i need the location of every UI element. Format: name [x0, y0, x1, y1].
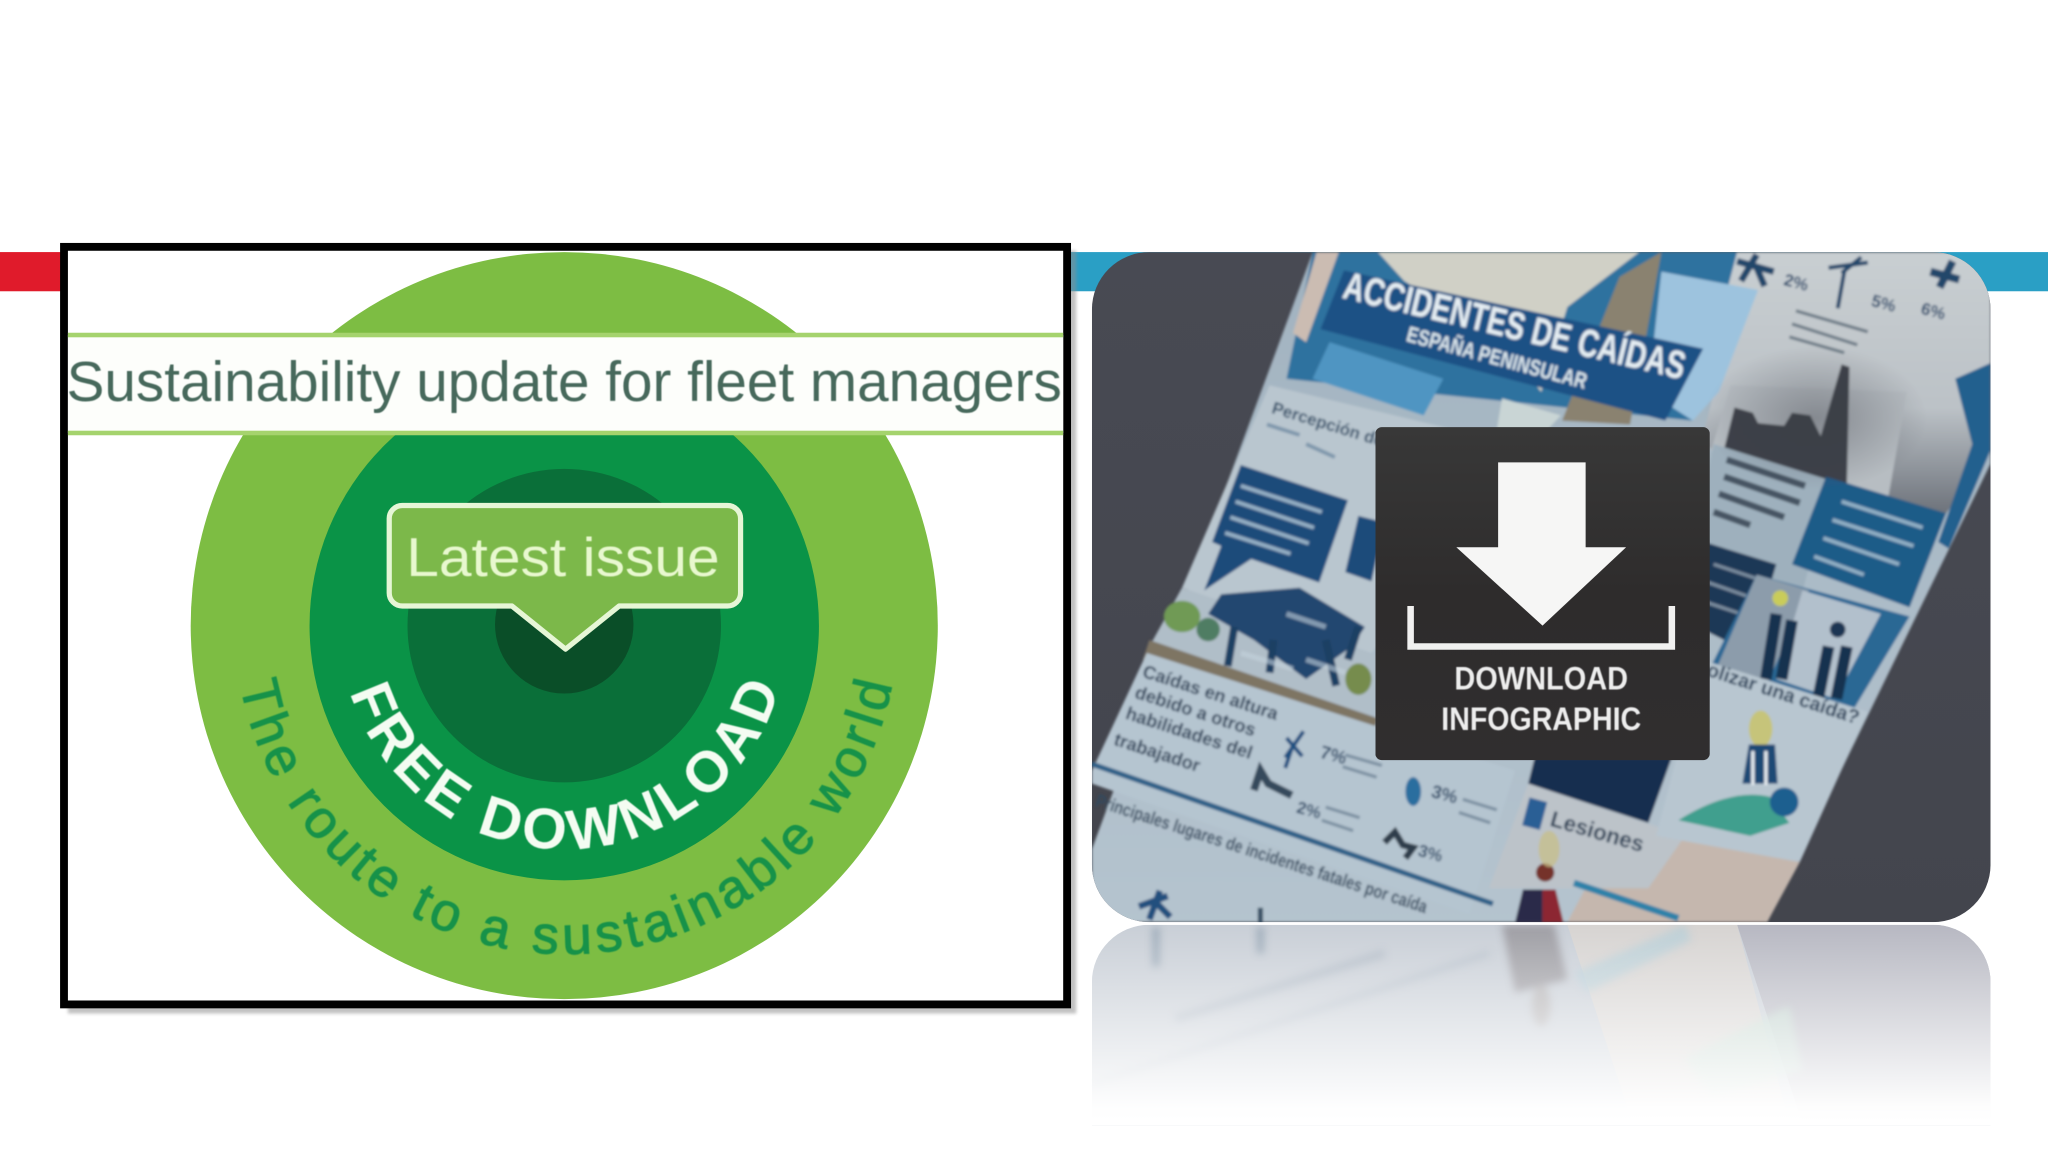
- poster: fall scene: olizar una caída?: [1704, 659, 1862, 729]
- callout: latest issue: [389, 505, 741, 649]
- poster: right text column: [1710, 444, 1827, 642]
- poster: beige corner: [1567, 836, 1800, 922]
- poster: title band: ESPAÑA PENINSULAR: [1404, 322, 1590, 394]
- poster: falls section: 7%: [1318, 741, 1349, 768]
- poster: dark box under download: [1528, 758, 1672, 823]
- red header band: [0, 252, 78, 291]
- poster: workers scene: [1711, 575, 1910, 712]
- poster: falls section: 3%: [1429, 780, 1460, 807]
- poster: top figures and statistics: 2%: [1782, 270, 1810, 295]
- reflection of infographic preview: [1092, 922, 1991, 1127]
- poster: falls section: Caídas en altura: [1140, 660, 1282, 724]
- poster: top right column: [1701, 252, 1991, 536]
- icon: download tray: [1411, 606, 1672, 647]
- banner text: Sustainability update for fleet managers: [67, 350, 1062, 413]
- poster: fatal incidents heading: Principales lugares de incidentes fatales por caída: [1093, 790, 1431, 917]
- poster: top figures and statistics: 6%: [1919, 299, 1948, 324]
- dark slate backdrop: [1092, 252, 1991, 922]
- poster: blue bar: [1574, 883, 1678, 918]
- innermost green circle: [495, 608, 634, 694]
- panel: sustainability badge: [60, 242, 1078, 1016]
- poster: falls section: habilidades del: [1123, 702, 1255, 763]
- poster: falls section: debido a otros: [1132, 681, 1259, 740]
- blue header band: [1058, 252, 2048, 291]
- middle green ring: [310, 435, 819, 880]
- poster: right city silhouette: [1711, 364, 1907, 503]
- callout: latest issue: Latest issue: [406, 526, 720, 588]
- poster: right blue rail: [1938, 363, 1991, 549]
- poster: fall scene: [1679, 662, 1864, 864]
- poster: falls section: [1092, 652, 1498, 862]
- poster: perception panel: [1181, 386, 1443, 652]
- banner strip: [60, 335, 1079, 433]
- poster: falls section: trabajador: [1112, 728, 1203, 776]
- poster: top figures and statistics: 5%: [1869, 291, 1898, 316]
- inner green ring: [408, 469, 721, 782]
- poster: title band: ACCIDENTES DE CAÍDAS: [1339, 264, 1690, 388]
- poster: top figures and statistics: [1737, 255, 1959, 324]
- curved text: the route to a sustainable world: The route to a sustainable world: [242, 676, 893, 956]
- poster: falls section: 3%: [1416, 841, 1445, 866]
- poster: perception panel: Percepción de: [1270, 398, 1386, 450]
- poster: top photo: [1287, 252, 1737, 421]
- poster: bottom figures: [1139, 891, 1170, 920]
- curved text: free download: FREE DOWNLOAD: [350, 680, 775, 850]
- poster: lesiones section: [1489, 784, 1685, 888]
- download box: INFOGRAPHIC: [1441, 700, 1641, 737]
- poster: right edge shading: [1720, 356, 1912, 478]
- poster: right blue callout: [1792, 477, 1946, 607]
- poster: divider line: [1092, 764, 1493, 904]
- icon: download arrow: [1456, 462, 1626, 626]
- outer green circle: [191, 252, 938, 999]
- poster: lesiones section: Lesiones: [1548, 806, 1647, 857]
- download label: DOWNLOAD: [1454, 660, 1628, 697]
- rotated poster: [1092, 252, 1991, 923]
- panel: infographic preview: [1092, 252, 1991, 923]
- poster: person figure: [1515, 831, 1563, 922]
- poster: illustration strip: [1143, 588, 1387, 731]
- download box: [1375, 427, 1710, 760]
- poster: speech bubble: [1204, 465, 1348, 590]
- poster: falls section: 2%: [1295, 798, 1323, 823]
